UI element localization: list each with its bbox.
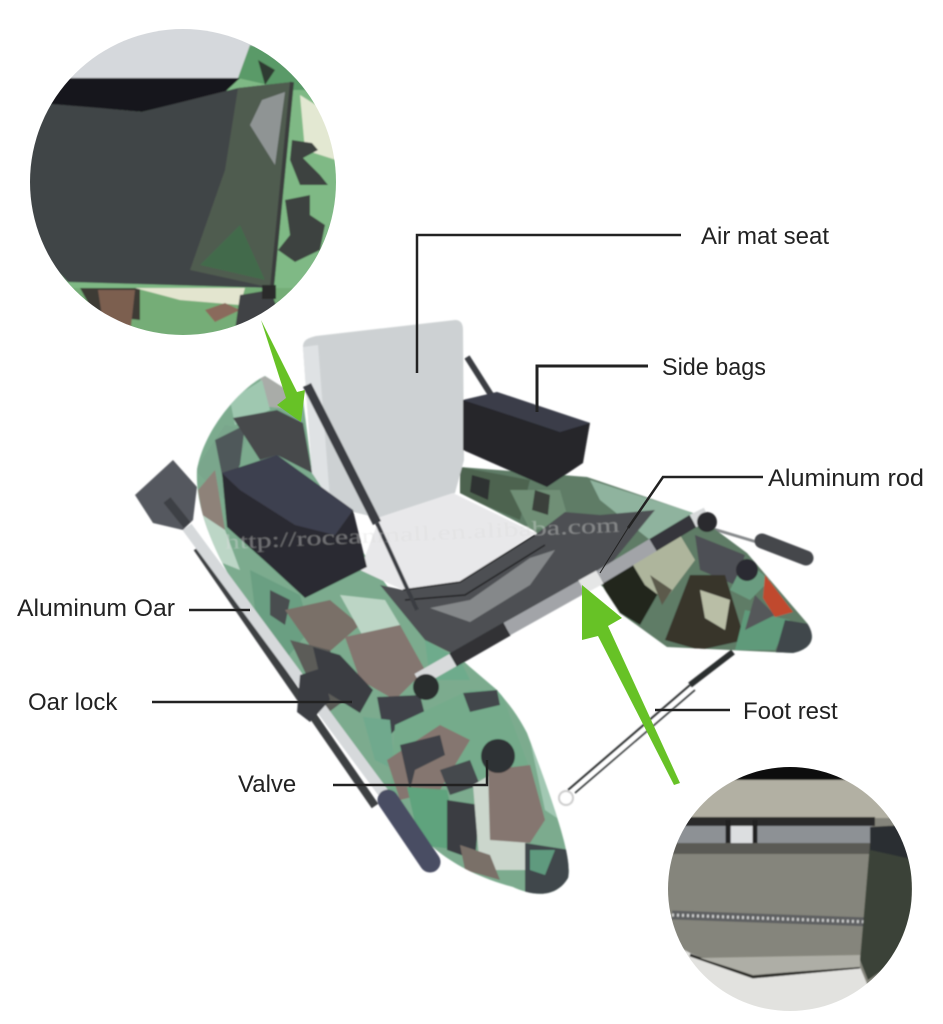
- label: air mat seat: Air mat seat: [701, 223, 829, 250]
- green arrow middle: [582, 585, 680, 785]
- seat mesh: [380, 510, 655, 655]
- valve: [481, 739, 515, 773]
- label: oar lock: Oar lock: [28, 689, 118, 716]
- side bag right: [463, 392, 590, 487]
- oar lock: [297, 647, 373, 722]
- seat bottom: [360, 493, 535, 590]
- label: side bags: [537, 354, 766, 412]
- hatch: [736, 559, 758, 581]
- seat back: [303, 320, 464, 518]
- label: valve: [238, 760, 487, 798]
- label: aluminum rod: [600, 465, 924, 573]
- seat highlight edge: [303, 345, 330, 500]
- net pocket on tube: [233, 410, 312, 473]
- oar underside strip: [197, 548, 375, 806]
- side bag left: [222, 455, 367, 598]
- seat straps: [307, 357, 545, 610]
- foot rest straps: [559, 652, 733, 805]
- boat illustration: [135, 320, 815, 895]
- left tube: [195, 376, 572, 895]
- right oar: [700, 525, 806, 558]
- left oar: [135, 460, 430, 862]
- label: aluminum rod: Aluminum rod: [768, 465, 924, 492]
- label: side bags: Side bags: [662, 354, 766, 381]
- aluminum rod: [413, 512, 717, 700]
- right tube: [460, 467, 815, 655]
- label: valve: Valve: [238, 771, 296, 798]
- label: aluminum oar: Aluminum Oar: [17, 595, 175, 622]
- watermark: http://roceanmall.en.alibaba.com: [224, 513, 620, 554]
- label: foot rest: Foot rest: [743, 698, 838, 725]
- circle inset: rod and mesh: [665, 765, 915, 1015]
- label: air mat seat: [417, 223, 829, 373]
- logo patch: [763, 575, 793, 617]
- green arrow top: [261, 320, 305, 422]
- circle inset: seat pocket: [25, 25, 340, 340]
